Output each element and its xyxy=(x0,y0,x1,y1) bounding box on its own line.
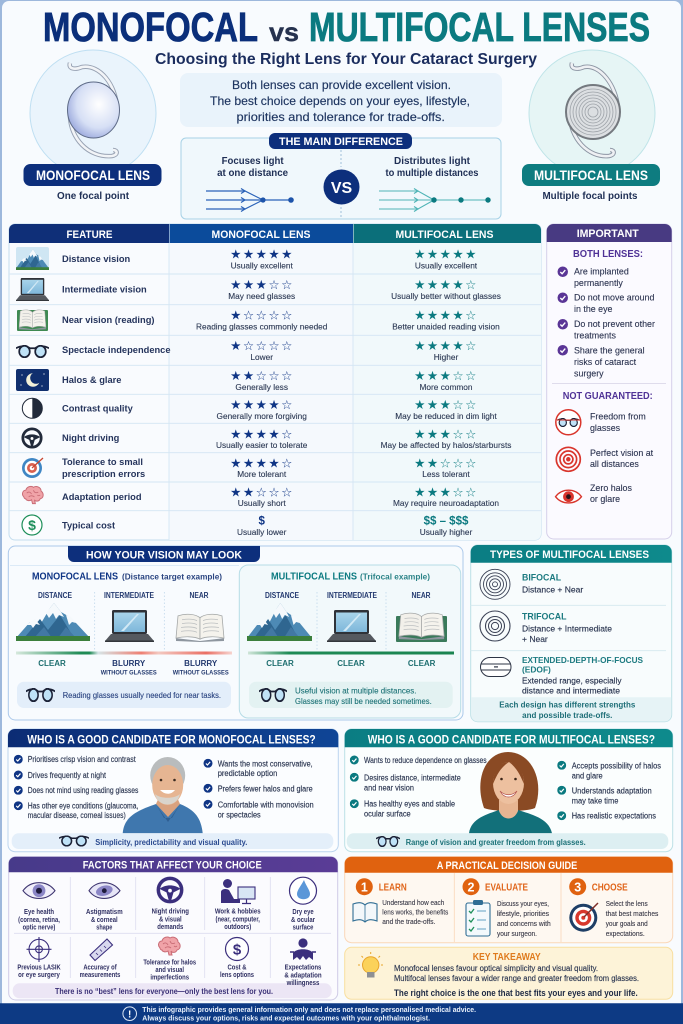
factor: eye health: Eye health xyxy=(24,909,54,916)
table headers: MONOFOCAL LENS xyxy=(212,229,310,241)
row: typical cost: $ xyxy=(258,516,265,528)
monofocal example: BLURRY xyxy=(112,659,146,668)
row: spectacle independence: ★☆☆☆☆ xyxy=(230,338,294,353)
row: contrast quality xyxy=(22,397,497,421)
right criteria: Understands adaptation xyxy=(572,786,652,795)
right criteria: Comfortable with monovision xyxy=(218,800,314,809)
step 2: evaluate: your surgeon. xyxy=(497,929,537,938)
not guaranteed list: Perfect vision at xyxy=(590,448,654,458)
row: spectacle independence: ★★★★☆ xyxy=(414,338,478,353)
monofocal example: NEAR xyxy=(190,591,209,600)
bifocal xyxy=(480,569,583,599)
factor: eye health: (cornea, retina, xyxy=(18,917,60,924)
monofocal lens label: MONOFOCAL LENS xyxy=(36,168,150,183)
panel: factors that affect your choice xyxy=(9,857,338,1000)
factor: astigmatism: & corneal xyxy=(91,917,118,924)
panel: how your vision may look xyxy=(8,546,463,720)
step 1: learn: lens works, the benefits xyxy=(382,908,449,917)
multifocal example: CLEAR xyxy=(337,659,365,668)
row: contrast quality: Contrast quality xyxy=(62,404,134,414)
monofocal example xyxy=(16,572,232,708)
step 1: learn: 1 xyxy=(361,880,368,894)
panel: monofocal candidate: WHO IS A GOOD CANDIDATE FOR MONOFOCAL LENSES? xyxy=(27,732,316,746)
both lenses list: in the eye xyxy=(574,304,613,314)
left criteria: macular disease, corneal issues) xyxy=(28,811,126,820)
bifocal: BIFOCAL xyxy=(522,572,562,582)
step 3: choose: that best matches xyxy=(606,909,659,918)
edof: distance and intermediate xyxy=(522,686,621,695)
row: halos and glare xyxy=(16,368,478,392)
right criteria: Has realistic expectations xyxy=(572,812,656,821)
step 1: learn: and the trade-offs. xyxy=(382,917,435,926)
factor: previous lasik: or eye surgery xyxy=(18,972,60,979)
bifocal: Distance + Near xyxy=(522,584,583,594)
title xyxy=(43,4,650,50)
monofocal example: WITHOUT GLASSES xyxy=(173,670,229,676)
step 3: choose xyxy=(569,878,659,938)
panel: monofocal candidate xyxy=(8,729,338,852)
multifocal example: CLEAR xyxy=(266,659,294,668)
left criteria: Has healthy eyes and stable xyxy=(364,800,455,809)
row: adaptation period: May require neuroadaptation xyxy=(393,498,499,508)
comparison table xyxy=(9,224,541,540)
heading tab xyxy=(68,546,260,562)
footnote: Each design has different strengths xyxy=(499,701,636,710)
factor: night driving: Night driving xyxy=(152,909,189,916)
row: adaptation period: Adaptation period xyxy=(62,492,142,502)
row: tolerance: ★★★★☆ xyxy=(230,455,294,470)
row: night driving: Usually easier to tolerate xyxy=(216,440,308,450)
photo: smiling older man xyxy=(123,757,203,833)
row: near vision: Better unaided reading vision xyxy=(392,322,500,332)
trifocal xyxy=(480,611,612,644)
diagram: multiple focal points xyxy=(379,188,491,212)
multifocal description: Distributes light xyxy=(394,156,471,167)
footer disclaimer xyxy=(0,1003,683,1024)
both lenses list: surgery xyxy=(574,368,604,378)
row: night driving: Night driving xyxy=(62,433,120,443)
row: adaptation period: ★★☆☆☆ xyxy=(230,484,294,499)
note: reading glasses: Reading glasses usually needed for near tasks. xyxy=(63,690,221,700)
monofocal lens label xyxy=(24,164,162,202)
left criteria: Does not mind using reading glasses xyxy=(28,786,138,795)
footer disclaimer: This infographic provides general information only and does not replace personalised medical advice. xyxy=(142,1005,476,1014)
factor: work and hobbies: Work & hobbies xyxy=(215,909,261,916)
row: halos and glare: Generally less xyxy=(235,382,288,392)
factor: dry eye: surface xyxy=(293,925,313,932)
step 3: choose: CHOOSE xyxy=(592,882,628,893)
row: typical cost: Usually lower xyxy=(237,527,287,537)
monofocal example: WITHOUT GLASSES xyxy=(101,670,157,676)
row: spectacle independence: Spectacle independence xyxy=(62,345,171,355)
panel: important xyxy=(547,224,672,539)
factor: previous lasik: Previous LASIK xyxy=(17,964,61,972)
both lenses list: treatments xyxy=(574,330,616,340)
factor: work and hobbies: (near, computer, xyxy=(216,916,260,923)
factor: night driving: demands xyxy=(157,924,183,931)
note: useful vision xyxy=(249,682,453,708)
row: typical cost: Typical cost xyxy=(62,520,115,530)
not guaranteed list: Zero halos xyxy=(590,483,632,493)
both lenses list xyxy=(558,249,655,378)
factor: astigmatism: Astigmatism xyxy=(86,909,123,916)
right criteria xyxy=(204,759,314,819)
multifocal example: INTERMEDIATE xyxy=(327,591,378,600)
factor: previous lasik xyxy=(17,937,61,979)
left criteria: Has other eye conditions (glaucoma, xyxy=(28,802,138,810)
title: MONOFOCAL xyxy=(43,4,258,50)
row: intermediate vision: Usually better without glasses xyxy=(391,291,501,301)
table headers xyxy=(9,224,541,243)
trifocal: Distance + Intermediate xyxy=(522,624,612,634)
not guaranteed list: all distances xyxy=(590,459,639,469)
panel: key takeaway xyxy=(345,947,673,999)
left criteria: Desires distance, intermediate xyxy=(364,773,461,782)
note: useful vision: Useful vision at multiple distances. xyxy=(295,687,416,696)
multifocal description xyxy=(386,156,479,179)
row: spectacle independence xyxy=(16,338,478,362)
vs badge: VS xyxy=(331,180,352,197)
factor: tolerance for halos: and visual xyxy=(155,967,184,974)
row: near vision xyxy=(17,308,500,332)
factor: accuracy of measurements xyxy=(80,939,120,979)
factor: tolerance for halos: Tolerance for halos xyxy=(143,960,196,966)
summary bar: Simplicity, predictability and visual quality. xyxy=(95,837,247,847)
panel: multifocal candidate xyxy=(345,729,673,852)
summary bar xyxy=(347,833,668,849)
heading tab: HOW YOUR VISION MAY LOOK xyxy=(86,550,242,562)
left criteria: Prioritises crisp vision and contrast xyxy=(28,755,136,764)
row: intermediate vision xyxy=(16,277,501,301)
step 2: evaluate: EVALUATE xyxy=(485,882,528,893)
monofocal description: at one distance xyxy=(217,168,289,179)
factor: work and hobbies xyxy=(215,879,261,931)
row: intermediate vision: May need glasses xyxy=(228,291,295,301)
right criteria: predictable option xyxy=(218,769,277,778)
intro text box: priorities and tolerance for trade-offs. xyxy=(236,110,445,124)
heading pill: THE MAIN DIFFERENCE xyxy=(279,136,403,148)
step 1: learn xyxy=(353,878,449,926)
row: near vision: ★☆☆☆☆ xyxy=(230,308,294,323)
edof: Extended range, especially xyxy=(522,676,622,686)
footnote: and possible trade-offs. xyxy=(522,711,612,720)
not guaranteed list xyxy=(556,391,654,504)
row: night driving: May be affected by halos/starbursts xyxy=(381,440,511,450)
factor: expectations xyxy=(284,938,322,987)
panel: factors that affect your choice: FACTORS THAT AFFECT YOUR CHOICE xyxy=(83,860,262,872)
step 3: choose: Select the lens xyxy=(606,899,648,908)
footnote xyxy=(471,697,671,722)
panel: the main difference xyxy=(181,133,501,219)
trifocal: TRIFOCAL xyxy=(522,612,567,622)
factor: work and hobbies: outdoors) xyxy=(224,924,251,931)
row: tolerance: Tolerance to small xyxy=(62,457,143,467)
edof: EXTENDED-DEPTH-OF-FOCUS xyxy=(522,655,643,665)
step 2: evaluate: Discuss your eyes, xyxy=(497,899,549,908)
row: distance vision: Usually excellent xyxy=(415,261,478,271)
monofocal example: BLURRY xyxy=(184,659,218,668)
multifocal example: CLEAR xyxy=(408,659,436,668)
both lenses list: Are implanted xyxy=(574,266,629,276)
row: halos and glare: More common xyxy=(419,382,473,392)
row: night driving: ★★★☆☆ xyxy=(414,426,478,441)
note: useful vision: Glasses may still be needed sometimes. xyxy=(295,697,432,706)
right criteria: may take time xyxy=(572,796,619,805)
panel: key takeaway: Monofocal lenses favour optical simplicity and visual quality. xyxy=(394,964,598,973)
table headers: FEATURE xyxy=(66,229,112,241)
row: typical cost xyxy=(22,515,473,537)
summary bar xyxy=(12,833,333,849)
factor: eye health xyxy=(18,883,60,932)
right criteria: Accepts possibility of halos xyxy=(572,761,661,770)
row: distance vision: ★★★★★ xyxy=(230,246,294,261)
both lenses list: Share the general xyxy=(574,346,645,356)
intro text box: Both lenses can provide excellent vision. xyxy=(232,78,451,92)
both lenses list: permanently xyxy=(574,278,623,288)
subtitle: Choosing the Right Lens for Your Cataract Surgery xyxy=(155,51,537,68)
factor: expectations: & adaptation xyxy=(284,972,322,980)
row: tolerance: Less tolerant xyxy=(422,469,470,479)
step 2: evaluate: lifestyle, priorities xyxy=(497,909,549,918)
row: contrast quality: May be reduced in dim light xyxy=(395,411,497,421)
multifocal example: DISTANCE xyxy=(265,591,300,600)
panel: practical decision guide xyxy=(345,857,673,943)
row: distance vision: Usually excellent xyxy=(231,261,294,271)
both lenses list: Do not move around xyxy=(574,292,654,302)
vs badge xyxy=(324,170,360,204)
intro text box xyxy=(180,73,502,127)
both lenses list: BOTH LENSES: xyxy=(573,249,643,260)
trifocal: + Near xyxy=(522,634,548,644)
factor: cost xyxy=(220,938,254,979)
multifocal description: to multiple distances xyxy=(386,168,479,179)
multifocal example: NEAR xyxy=(412,591,431,600)
step 3: choose: your goals and xyxy=(606,919,648,928)
monofocal lens label: One focal point xyxy=(57,191,130,202)
left criteria: and near vision xyxy=(364,783,414,792)
step 1: learn: LEARN xyxy=(379,882,407,893)
summary bar: There is no “best” lens for everyone—only the best lens for you. xyxy=(55,986,273,996)
panel: important: IMPORTANT xyxy=(577,228,639,240)
row: spectacle independence: Lower xyxy=(250,352,273,362)
not guaranteed list: Freedom from xyxy=(590,412,646,422)
note: reading glasses xyxy=(17,682,231,708)
row: contrast quality: ★★★☆☆ xyxy=(414,397,478,412)
footer disclaimer: ! xyxy=(128,1010,131,1021)
right criteria xyxy=(557,761,661,821)
row: contrast quality: ★★★★☆ xyxy=(230,397,294,412)
diagram: single focal point xyxy=(206,188,294,212)
title: vs xyxy=(269,17,299,47)
both lenses list: Do not prevent other xyxy=(574,319,655,329)
left criteria xyxy=(350,756,487,819)
row: near vision: Reading glasses commonly needed xyxy=(196,322,328,332)
factor: accuracy of measurements: measurements xyxy=(80,972,120,979)
row: distance vision: Distance vision xyxy=(62,254,131,264)
monofocal description xyxy=(217,156,289,179)
monofocal example: DISTANCE xyxy=(38,591,73,600)
multifocal example: MULTIFOCAL LENS xyxy=(271,572,357,582)
table headers: MULTIFOCAL LENS xyxy=(396,229,494,241)
row: night driving xyxy=(23,426,511,450)
multifocal lens label: MULTIFOCAL LENS xyxy=(534,168,648,183)
factor: astigmatism xyxy=(86,883,123,932)
step 3: choose: expectations. xyxy=(606,929,645,938)
factor: tolerance for halos xyxy=(143,937,196,982)
row: near vision: ★★★★☆ xyxy=(414,308,478,323)
row: tolerance: prescription errors xyxy=(62,469,145,479)
step 2: evaluate xyxy=(462,878,551,938)
edof: (EDOF) xyxy=(522,664,551,674)
panel: key takeaway: The right choice is the one that best fits your eyes and your life. xyxy=(394,988,638,998)
panel: practical decision guide: A PRACTICAL DECISION GUIDE xyxy=(437,860,577,872)
summary bar xyxy=(13,983,332,998)
row: intermediate vision: ★★★☆☆ xyxy=(230,277,294,292)
monofocal lens illustration xyxy=(30,50,156,176)
row: typical cost: $$ – $$$ xyxy=(424,516,469,528)
row: typical cost: $ xyxy=(28,517,36,533)
row: intermediate vision: ★★★★☆ xyxy=(414,277,478,292)
multifocal lens illustration xyxy=(529,50,655,176)
row: near vision: Near vision (reading) xyxy=(62,315,154,325)
row: distance vision: ★★★★★ xyxy=(414,246,478,261)
panel: types of multifocal lenses xyxy=(471,545,672,722)
multifocal example xyxy=(239,565,461,718)
row: typical cost: Usually higher xyxy=(420,527,473,537)
both lenses list: risks of cataract xyxy=(574,357,637,367)
multifocal example: (Trifocal example) xyxy=(360,572,430,582)
multifocal lens label xyxy=(522,164,660,202)
factor: tolerance for halos: imperfections xyxy=(150,975,189,982)
not guaranteed list: glasses xyxy=(590,423,621,433)
step 2: evaluate: 2 xyxy=(468,880,475,894)
panel: key takeaway: KEY TAKEAWAY xyxy=(473,952,541,963)
factor: cost: $ xyxy=(233,942,242,958)
factor: night driving: & visual xyxy=(159,916,182,923)
row: adaptation period: ★★★☆☆ xyxy=(414,484,478,499)
panel: types of multifocal lenses: TYPES OF MULTIFOCAL LENSES xyxy=(490,549,649,561)
factor: accuracy of measurements: Accuracy of xyxy=(83,964,117,972)
right criteria: and glare xyxy=(572,771,603,780)
multifocal lens label: Multiple focal points xyxy=(542,191,638,202)
factor: dry eye xyxy=(290,877,316,932)
summary bar: Range of vision and greater freedom from glasses. xyxy=(406,837,586,847)
right criteria: Prefers fewer halos and glare xyxy=(218,784,313,793)
factor: cost: lens options xyxy=(220,972,254,979)
row: night driving: ★★★★☆ xyxy=(230,426,294,441)
step 2: evaluate: and concerns with xyxy=(497,919,551,928)
monofocal example: (Distance target example) xyxy=(122,572,222,582)
left criteria xyxy=(14,755,138,820)
row: halos and glare: ★★★☆☆ xyxy=(414,368,478,383)
factor: dry eye: & ocular xyxy=(291,917,315,924)
factor: eye health: optic nerve) xyxy=(23,925,55,932)
row: tolerance xyxy=(22,455,478,479)
monofocal example: CLEAR xyxy=(38,659,66,668)
monofocal example: INTERMEDIATE xyxy=(104,591,155,600)
left criteria: Drives frequently at night xyxy=(28,771,107,780)
row: spectacle independence: Higher xyxy=(434,352,458,362)
row: adaptation period xyxy=(22,484,499,508)
row: halos and glare: Halos & glare xyxy=(62,375,121,385)
row: tolerance: More tolerant xyxy=(237,469,287,479)
left criteria: Wants to reduce dependence on glasses xyxy=(364,756,487,765)
footer disclaimer: Always discuss your options, risks and expected outcomes with your ophthalmologist. xyxy=(142,1013,430,1022)
factor: astigmatism: shape xyxy=(96,925,112,932)
intro text box: The best choice depends on your eyes, lifestyle, xyxy=(210,94,470,108)
right criteria: Wants the most conservative, xyxy=(218,759,313,768)
factor: dry eye: Dry eye xyxy=(292,909,314,916)
right criteria: or spectacles xyxy=(218,810,261,819)
not guaranteed list: or glare xyxy=(590,494,620,504)
edof xyxy=(480,655,643,695)
photo: smiling woman xyxy=(469,752,552,833)
row: distance vision xyxy=(16,246,478,271)
step 1: learn: Understand how each xyxy=(382,898,444,907)
row: halos and glare: ★★☆☆☆ xyxy=(230,368,294,383)
factor: expectations: Expectations xyxy=(285,965,321,972)
factor: expectations: willingness xyxy=(286,980,319,987)
row: contrast quality: Generally more forgiving xyxy=(217,411,307,421)
factor: cost: Cost & xyxy=(228,964,246,972)
factor: night driving xyxy=(152,878,189,931)
heading pill xyxy=(269,133,412,149)
row: adaptation period: Usually short xyxy=(238,498,286,508)
not guaranteed list: NOT GUARANTEED: xyxy=(563,391,653,402)
monofocal example: MONOFOCAL LENS xyxy=(32,572,118,582)
left criteria: ocular surface xyxy=(364,810,411,819)
monofocal description: Focuses light xyxy=(222,156,284,167)
icon: light bulb xyxy=(358,952,383,978)
step 3: choose: 3 xyxy=(574,880,581,894)
row: tolerance: ★★☆☆☆ xyxy=(414,455,478,470)
panel: key takeaway: Multifocal lenses favour a wider range and greater freedom from glasses. xyxy=(394,974,639,983)
row: intermediate vision: Intermediate vision xyxy=(62,284,147,294)
